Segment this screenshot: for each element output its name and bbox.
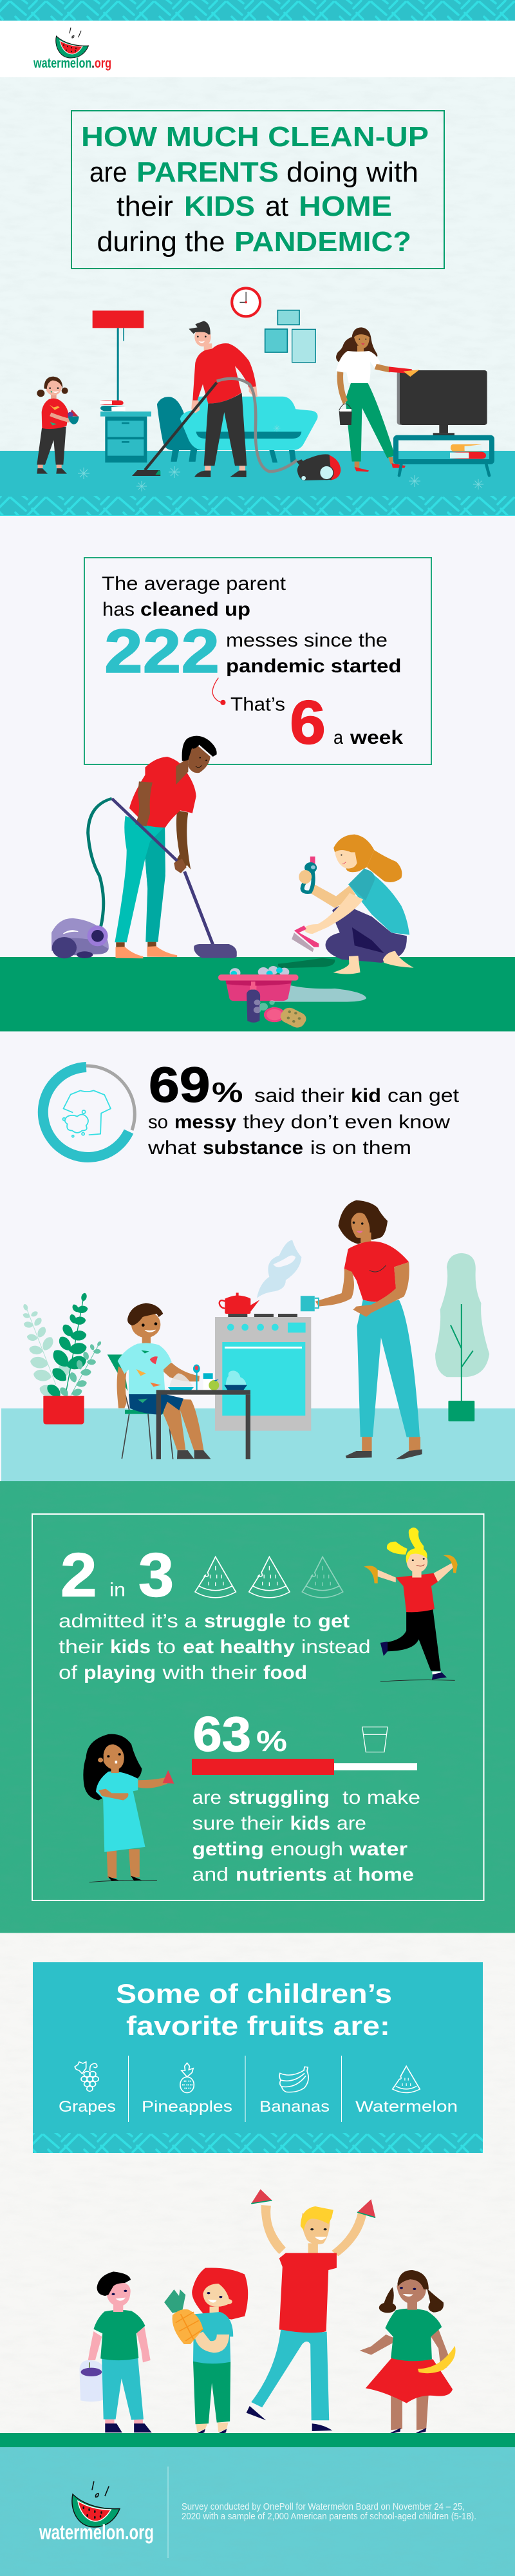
- text: struggle to get kids to eat healthy: kids: [110, 1636, 151, 1658]
- title: during the: [97, 226, 225, 258]
- stat: 63%: %: [256, 1725, 287, 1757]
- floor band: [0, 2433, 515, 2447]
- TV and stand: [389, 366, 492, 475]
- text: struggling to make sure: getting: [192, 1839, 264, 1860]
- fruit labels: Pineapples: [142, 2098, 232, 2116]
- steam: [257, 1240, 301, 1298]
- figure: tall boy with watermelon slices: [247, 2189, 375, 2431]
- bar: 63%: [192, 1759, 417, 1775]
- logo: watermelon.org: [33, 28, 111, 71]
- figure: woman dusting the TV: [336, 327, 406, 472]
- figure: woman scrubbing: [273, 835, 414, 1002]
- title: KIDS: [184, 191, 255, 222]
- stat: 2 in 3: [61, 1540, 174, 1610]
- footer: [0, 2447, 515, 2576]
- icon: grapes: [75, 2062, 98, 2091]
- title: are: [89, 156, 127, 188]
- callout box: pandemic started: [226, 656, 402, 677]
- panel: 2 in 3 and 63%: [0, 1481, 515, 1932]
- figure: girl with banana: [360, 2270, 456, 2434]
- card pattern strip: [33, 2133, 483, 2153]
- stat: 2 in 3: 3: [138, 1540, 174, 1610]
- big number 6: 6: [290, 688, 326, 757]
- title: HOME: [299, 191, 392, 222]
- plant in red pot: [22, 1293, 102, 1425]
- fruit labels: Grapes: [59, 2098, 116, 2116]
- callout box: [84, 558, 431, 764]
- figure: girl with fruit bowl: [37, 377, 79, 474]
- figure: boy at table: [108, 1303, 250, 1459]
- heading: [116, 1978, 392, 2041]
- figure: girl with pineapple: [164, 2268, 248, 2436]
- text: struggle to get kids to eat healthy: food: [263, 1662, 307, 1683]
- stat: 69% said their kid: kid: [351, 1085, 381, 1106]
- text: struggling to make sure: [192, 1787, 420, 1886]
- text: struggle to get kids to eat healthy: with their: [162, 1662, 257, 1683]
- text: struggle to get kids to eat healthy: instead: [301, 1636, 371, 1658]
- title: at: [265, 191, 288, 222]
- survey source note: Survey conducted by OnePoll for Watermelon Board on November 24 – 25,: [182, 2502, 465, 2512]
- donut chart: 69%: [43, 1066, 135, 1157]
- icon: bananas: [279, 2067, 308, 2092]
- tall potted plant: [435, 1253, 489, 1421]
- text: struggling to make sure: struggling: [229, 1787, 330, 1808]
- text: struggle to get kids to eat healthy: playing: [84, 1662, 156, 1683]
- title: doing with: [286, 156, 418, 188]
- stat: 69% said their kid: can get: [388, 1085, 460, 1106]
- callout box: cleaned up: [140, 599, 250, 620]
- text: struggle to get kids to eat healthy: of: [59, 1662, 78, 1683]
- stat: 69% said their kid: what: [147, 1137, 197, 1159]
- cleaning supplies: [218, 966, 309, 1030]
- survey source note: [182, 2502, 476, 2522]
- icon: watermelon slice: [393, 2066, 420, 2092]
- text: struggle to get kids to eat healthy: eat healthy: [183, 1636, 295, 1658]
- fruit labels: Bananas: [259, 2098, 330, 2116]
- floor lamp and nightstand: [93, 310, 151, 462]
- text: struggling to make sure: and: [192, 1864, 229, 1886]
- text: struggling to make sure: are: [192, 1787, 221, 1808]
- stat: 69% said their kid: said their: [254, 1085, 344, 1106]
- callout box: messes since the: [226, 630, 388, 651]
- stat: 69% said their kid: 69: [149, 1057, 210, 1113]
- callout box: week: [350, 727, 403, 748]
- stove and kettle: [215, 1293, 311, 1431]
- stat: 69% said their kid: messy: [174, 1112, 236, 1133]
- figure: boy with grape bucket: [79, 2271, 152, 2432]
- title: HOW MUCH CLEAN-UP: [81, 121, 429, 153]
- figure: girl with bananas: [364, 1528, 458, 1681]
- sofa: [157, 397, 318, 462]
- stat: 69% said their kid: [147, 1057, 460, 1159]
- stat: 63%: 63: [193, 1707, 251, 1762]
- callout box: has: [102, 599, 135, 620]
- text: struggling to make sure: to make: [342, 1787, 420, 1808]
- heading: Some of children’s: [116, 1978, 392, 2009]
- text: struggling to make sure: water: [349, 1839, 407, 1860]
- heading: favorite fruits are:: [126, 2011, 390, 2041]
- stat: 69% said their kid: is on them: [310, 1137, 411, 1159]
- stat: 2 in 3: 2: [61, 1540, 97, 1610]
- title: PANDEMIC?: [234, 226, 411, 258]
- figure: mother with cup: [301, 1200, 422, 1459]
- text: struggle to get kids to eat healthy: get: [318, 1611, 350, 1632]
- icon: stained t-shirt: [62, 1090, 111, 1137]
- text: struggle to get kids to eat healthy: their: [59, 1636, 104, 1658]
- figure: man vacuuming, purple vacuum: [52, 736, 237, 958]
- text: struggling to make sure: are: [337, 1813, 366, 1834]
- header band: [0, 0, 515, 77]
- bottom pattern band: [0, 496, 515, 515]
- vacuum cleaner: [297, 454, 341, 480]
- fruit labels: Watermelon: [355, 2098, 458, 2116]
- panel: favorite fruits and kids: [0, 1932, 515, 2447]
- icons: three watermelon slices: [195, 1557, 343, 1598]
- icon: wall clock: [232, 288, 260, 316]
- text: struggling to make sure: sure their: [192, 1813, 283, 1834]
- vacuum hose: [217, 379, 297, 471]
- floor specks: [78, 425, 483, 491]
- logo: watermelon.org footer: watermelon.org: [39, 2521, 154, 2544]
- stat: 2 in 3: in: [109, 1579, 126, 1601]
- icon: glass of water: [362, 1727, 388, 1752]
- title: PARENTS: [136, 156, 279, 188]
- text: struggle to get kids to eat healthy: to: [293, 1611, 312, 1632]
- callout box: The average parent: [102, 573, 286, 594]
- stat: 69% said their kid: so: [148, 1112, 168, 1133]
- arrow: 222 to 6 a week: [212, 678, 226, 705]
- fruit labels: [59, 2098, 458, 2116]
- picture frames: [265, 310, 315, 363]
- big number 222: 222: [104, 617, 220, 686]
- text: struggling to make sure: kids: [290, 1813, 330, 1834]
- panel: 222 messes: [0, 515, 515, 1030]
- figure: girl with watermelon: [83, 1734, 174, 1882]
- text: struggling to make sure: at: [333, 1864, 352, 1886]
- fruits card: [33, 1962, 483, 2153]
- stat: 69% said their kid: %: [212, 1077, 243, 1108]
- logo: watermelon.org: watermelon.org: [33, 56, 111, 71]
- text: struggling to make sure: home: [358, 1864, 414, 1886]
- figure: man vacuuming: [132, 321, 258, 477]
- panel: hero: [0, 77, 515, 515]
- text: struggle to get kids to eat healthy: [59, 1611, 371, 1683]
- text: struggle to get kids to eat healthy: struggle: [204, 1611, 286, 1632]
- stat: 69% said their kid: they don’t even know: [243, 1112, 450, 1133]
- text: struggle to get kids to eat healthy: admitted it’s a: [59, 1611, 197, 1632]
- text: struggle to get kids to eat healthy: to: [157, 1636, 176, 1658]
- panel: 69 percent: [0, 1030, 515, 1481]
- survey source note: 2020 with a sample of 2,000 American parents of school-aged children (5-18).: [182, 2512, 476, 2522]
- callout box: That’s: [230, 694, 285, 715]
- text: struggling to make sure: enough: [270, 1839, 343, 1860]
- title: [71, 111, 444, 269]
- callout box: a: [333, 727, 343, 748]
- logo: watermelon.org footer: [39, 2481, 154, 2544]
- title: their: [117, 191, 173, 222]
- stat: 69% said their kid: substance: [203, 1137, 303, 1159]
- icon: pineapple: [180, 2063, 194, 2093]
- text: struggling to make sure: nutrients: [236, 1864, 327, 1886]
- stat: 63%: [193, 1707, 287, 1762]
